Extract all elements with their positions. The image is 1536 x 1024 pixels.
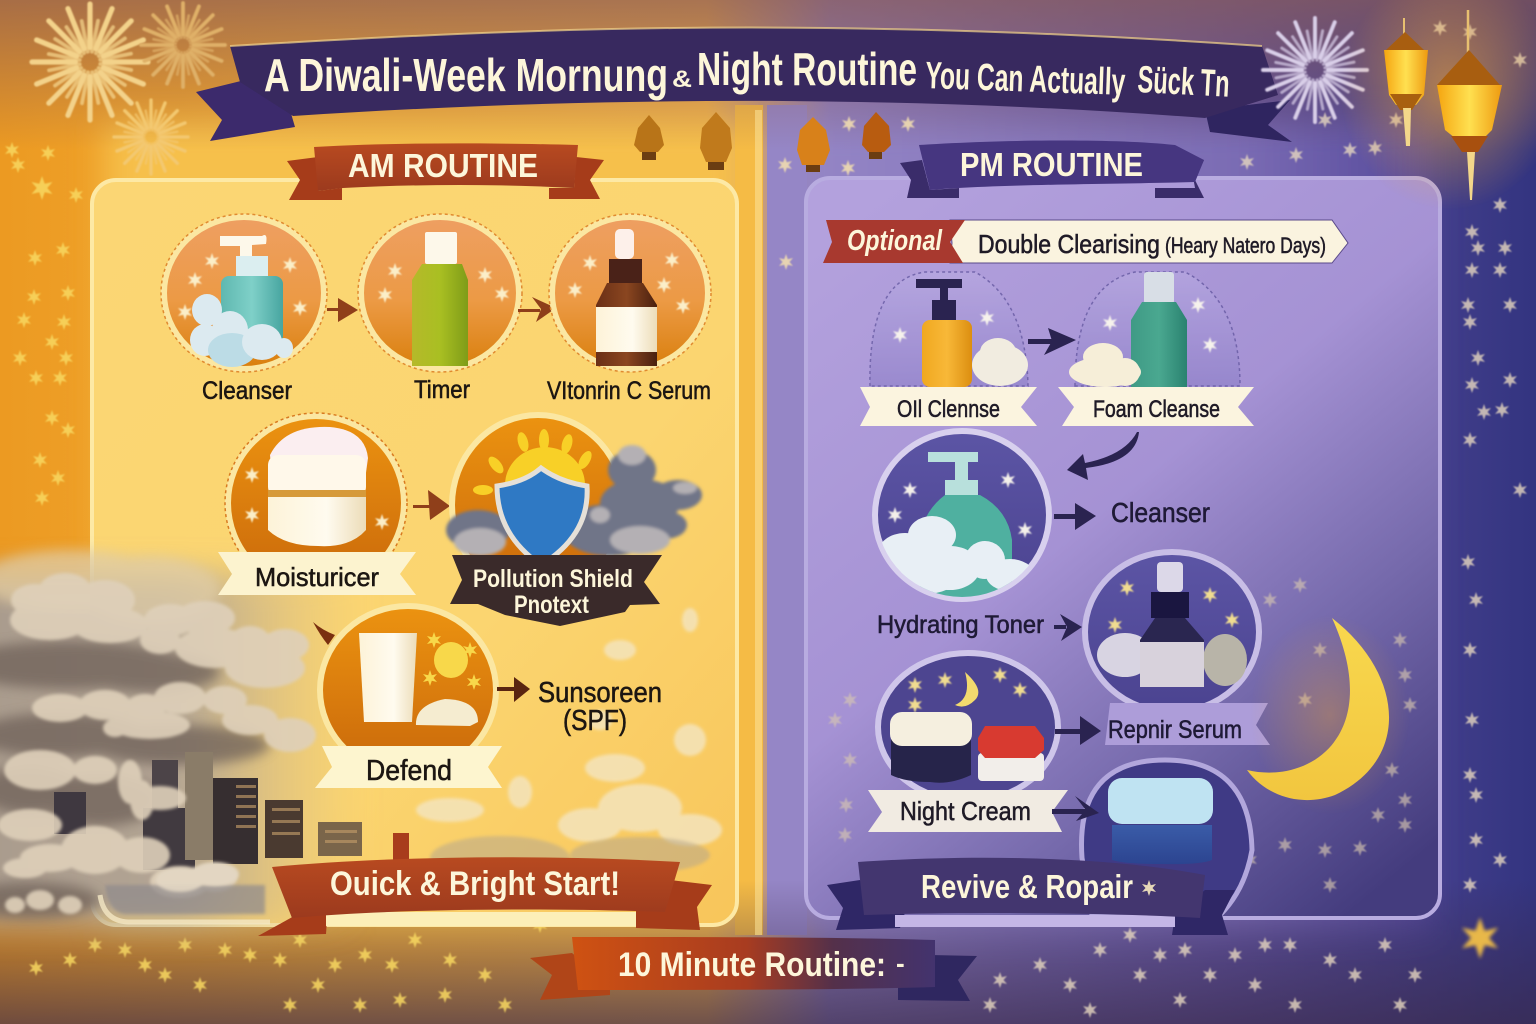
grey card corner	[105, 885, 265, 914]
firework: lower left	[114, 100, 188, 174]
step: cleanser	[161, 214, 327, 372]
icon: foam	[1069, 343, 1141, 387]
title banner	[230, 28, 1278, 118]
ribbon: 10 minute routine: 10 Minute Routine:	[618, 946, 886, 984]
icon: green bottle	[1131, 272, 1187, 387]
step: defend sunscreen	[313, 606, 496, 774]
icon: blue shield	[497, 468, 587, 565]
pale sparkles inside PM card	[828, 577, 1417, 893]
label: pollution shield protect: Pollution Shield	[473, 565, 633, 593]
icon: black jar	[890, 712, 972, 783]
label: night cream: Night Cream	[900, 796, 1031, 826]
icon: dropper bottle	[596, 229, 657, 366]
tag: optional double cleansing: (Heary Natero Days)	[1165, 233, 1326, 258]
label: night cream	[868, 790, 1068, 832]
icon: sunscreen tube	[359, 633, 417, 722]
step: vitamin C serum	[549, 214, 711, 372]
label: repair serum	[1105, 703, 1270, 745]
arrow: moisturizer to shield	[413, 490, 450, 520]
icon: green bottle	[412, 232, 468, 366]
label: cleanser: Cleanser	[202, 377, 292, 405]
icon: crescent small	[955, 672, 978, 707]
smog and city skyline	[0, 550, 722, 925]
pale haze top	[0, 550, 220, 624]
arrow: to cleanser label	[1054, 503, 1096, 530]
icon: smog clouds	[446, 445, 702, 556]
AM routine banner	[287, 143, 604, 200]
soft clouds lower right of AM card	[416, 608, 722, 846]
icon: pump bottle	[220, 235, 283, 344]
firework: top left small	[141, 3, 225, 87]
arrow: toner to serum	[1054, 614, 1082, 641]
step: foam cleanse	[1069, 272, 1240, 387]
label: foam cleanse: Foam Cleanse	[1093, 396, 1220, 423]
ribbon: 10 minute routine	[530, 937, 977, 1001]
step: oil cleanse	[870, 272, 1028, 387]
title text: &	[672, 66, 692, 93]
step: hydrating serum	[1085, 552, 1259, 712]
title text: A Diwali-Week Mornung	[264, 49, 668, 101]
PM routine banner	[900, 140, 1204, 198]
firework: top right	[1263, 18, 1367, 122]
icon: sun	[473, 429, 594, 495]
icon: cream mound	[416, 699, 478, 726]
grey smog base over AM card	[430, 836, 710, 880]
arrow: night cream to repair serum	[1055, 716, 1101, 745]
step: night creams	[878, 653, 1058, 801]
tag: optional double cleansing: Double Clearising	[978, 229, 1160, 259]
icon: sun	[423, 632, 481, 690]
AM routine heading: AM ROUTINE	[348, 147, 538, 184]
ribbon: quick and bright start	[258, 833, 712, 936]
label: defend: Defend	[366, 755, 452, 787]
label: pollution shield protect: Pnotext	[514, 591, 590, 619]
arrow: cleanser to primer	[327, 298, 358, 322]
dark smog bands	[0, 641, 270, 918]
lantern: left	[1384, 18, 1428, 146]
title text: You Can Actually	[925, 55, 1126, 104]
label: foam cleanse	[1058, 387, 1254, 426]
label: moisturizer: Moisturicer	[255, 562, 379, 592]
PM routine heading: PM ROUTINE	[960, 146, 1143, 183]
panel: PM routine card	[806, 178, 1440, 918]
icon: cloud puffs	[1097, 633, 1247, 686]
arrow: curved into defend	[313, 622, 335, 645]
label: sunscreen SPF	[538, 677, 662, 737]
icon: dropper bottle	[1140, 562, 1204, 687]
lantern glow	[1340, 0, 1536, 210]
label: defend	[315, 746, 502, 788]
icon: foam	[877, 516, 1034, 594]
ribbon: revive and repair: Revive & Ropair	[921, 868, 1133, 905]
icon: blue cream jar	[1108, 778, 1213, 864]
label: pollution shield protect	[450, 555, 662, 626]
arrow: night cream to jar	[1052, 796, 1099, 821]
arrow: primer to vitamin C	[518, 297, 556, 322]
title banner tails	[196, 80, 1292, 142]
tag: optional double cleansing: Optional	[847, 225, 943, 257]
gold sparkles left and bottom	[5, 142, 547, 1013]
lantern: right	[1437, 10, 1502, 200]
icon: foam	[972, 338, 1028, 386]
label: PM cleanser: Cleanser	[1111, 497, 1210, 528]
moon	[1247, 615, 1410, 815]
large gold sparkle bottom right	[1462, 917, 1498, 959]
label: sunscreen SPF: (SPF)	[563, 705, 627, 737]
label: repair serum: Repnir Serum	[1108, 716, 1242, 744]
title text: Sück Tn	[1137, 59, 1231, 106]
label: sunscreen SPF: Sunsoreen	[538, 677, 662, 709]
ribbon: 10 minute routine: -	[896, 948, 905, 978]
ribbon: revive and repair	[827, 858, 1235, 935]
arrow: oil to foam	[1028, 328, 1076, 355]
small lanterns AM	[634, 112, 732, 170]
label: primer: Timer	[414, 376, 470, 404]
step: primer	[358, 214, 522, 372]
pale puffs on card corner	[156, 862, 239, 892]
pale sparkles right and bottom	[983, 20, 1527, 1018]
step: blue jar	[1081, 760, 1252, 915]
icon: red jar	[978, 726, 1044, 781]
arrow: curved to cleanser	[1067, 432, 1139, 480]
title text	[264, 43, 1231, 106]
icon: cream jar	[268, 427, 368, 546]
label: vitamin C serum: VItonrin C Serum	[547, 377, 711, 405]
ribbon: quick and bright start: Ouick & Bright Start!	[330, 865, 620, 903]
icon: orange pump bottle	[916, 279, 972, 387]
title text: Night Routine	[697, 43, 917, 95]
panel: AM routine card	[92, 180, 737, 925]
step: pollution shield	[446, 415, 702, 595]
label: oil cleanse: OIl Clennse	[897, 396, 1000, 423]
tag: optional double cleansing	[823, 220, 1348, 263]
small lanterns PM	[778, 112, 915, 270]
pale cloud puffs	[0, 573, 316, 914]
step: moisturizer	[225, 413, 407, 593]
buildings	[54, 752, 362, 870]
firework: top left large	[32, 4, 148, 120]
icon: pump bottle	[920, 452, 1012, 600]
arrow: defend to sunscreen	[497, 677, 530, 702]
step: PM cleanser	[875, 431, 1049, 600]
icon: foam	[190, 294, 293, 367]
label: moisturizer	[218, 552, 416, 595]
label: hydrating toner: Hydrating Toner	[877, 611, 1044, 639]
label: oil cleanse	[860, 387, 1037, 426]
